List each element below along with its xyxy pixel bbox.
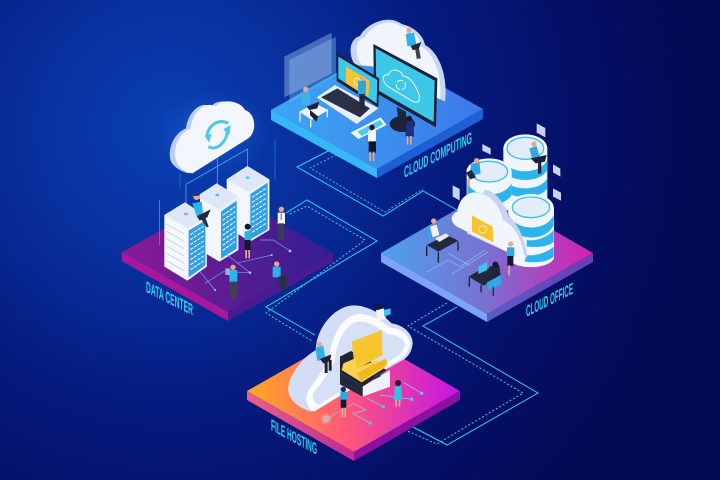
folder cloud — [288, 305, 413, 412]
platform slab: data center — [122, 193, 333, 321]
woman in black — [340, 387, 347, 417]
platform slab: cloud computing — [271, 50, 483, 178]
laptop — [317, 53, 379, 124]
cloud behind monitor — [351, 20, 446, 102]
cloud and servers scene — [157, 90, 291, 298]
file drawer with folders — [340, 330, 390, 397]
database cylinder back — [503, 134, 547, 200]
text: CLOUD COMPUTING — [404, 129, 472, 182]
glow dots — [214, 250, 291, 291]
cloud with folder — [452, 189, 527, 260]
database cylinder left — [466, 158, 512, 210]
person on server — [192, 193, 211, 227]
platform: cloud office: CLOUD OFFICE — [526, 279, 573, 321]
desk with worker — [427, 218, 458, 263]
man on cloud — [315, 342, 332, 373]
platform: cloud computing — [271, 20, 483, 182]
person on back cylinder — [529, 141, 547, 174]
circuit traces on platform — [327, 382, 422, 423]
database cylinder front — [508, 194, 554, 267]
floating file icons — [453, 123, 561, 201]
woman in blue dress — [405, 116, 414, 145]
woman in cyan — [394, 380, 402, 407]
platform slab: file hosting — [247, 330, 460, 461]
man on laptop — [358, 75, 366, 109]
standing woman — [507, 241, 514, 275]
server racks — [164, 166, 269, 281]
woman with tablet on cloud — [375, 304, 391, 321]
circuit lines between platforms — [266, 150, 538, 445]
monitor — [373, 44, 437, 132]
man with tablet — [225, 265, 237, 298]
seated man — [273, 261, 287, 290]
circuit traces on platform — [200, 240, 290, 290]
platform: data center: DATA CENTER — [146, 278, 193, 319]
person standing back — [278, 207, 285, 240]
woman at server — [244, 224, 251, 258]
glass panels — [284, 33, 336, 103]
platform slab: cloud office — [381, 192, 593, 322]
platform: cloud office — [381, 123, 593, 322]
connector lines — [159, 140, 275, 245]
icon: sync cloud — [157, 90, 270, 177]
person on left cylinder — [466, 158, 481, 186]
man on cloud — [406, 28, 421, 59]
smartphone — [351, 117, 387, 139]
platform: file hosting — [247, 304, 460, 461]
circuit traces on platform — [427, 250, 488, 274]
desk with woman — [469, 262, 501, 296]
woman with phone — [368, 125, 376, 161]
platform: data center — [122, 90, 333, 321]
connector nodes — [320, 392, 423, 425]
desk with man — [299, 87, 328, 127]
